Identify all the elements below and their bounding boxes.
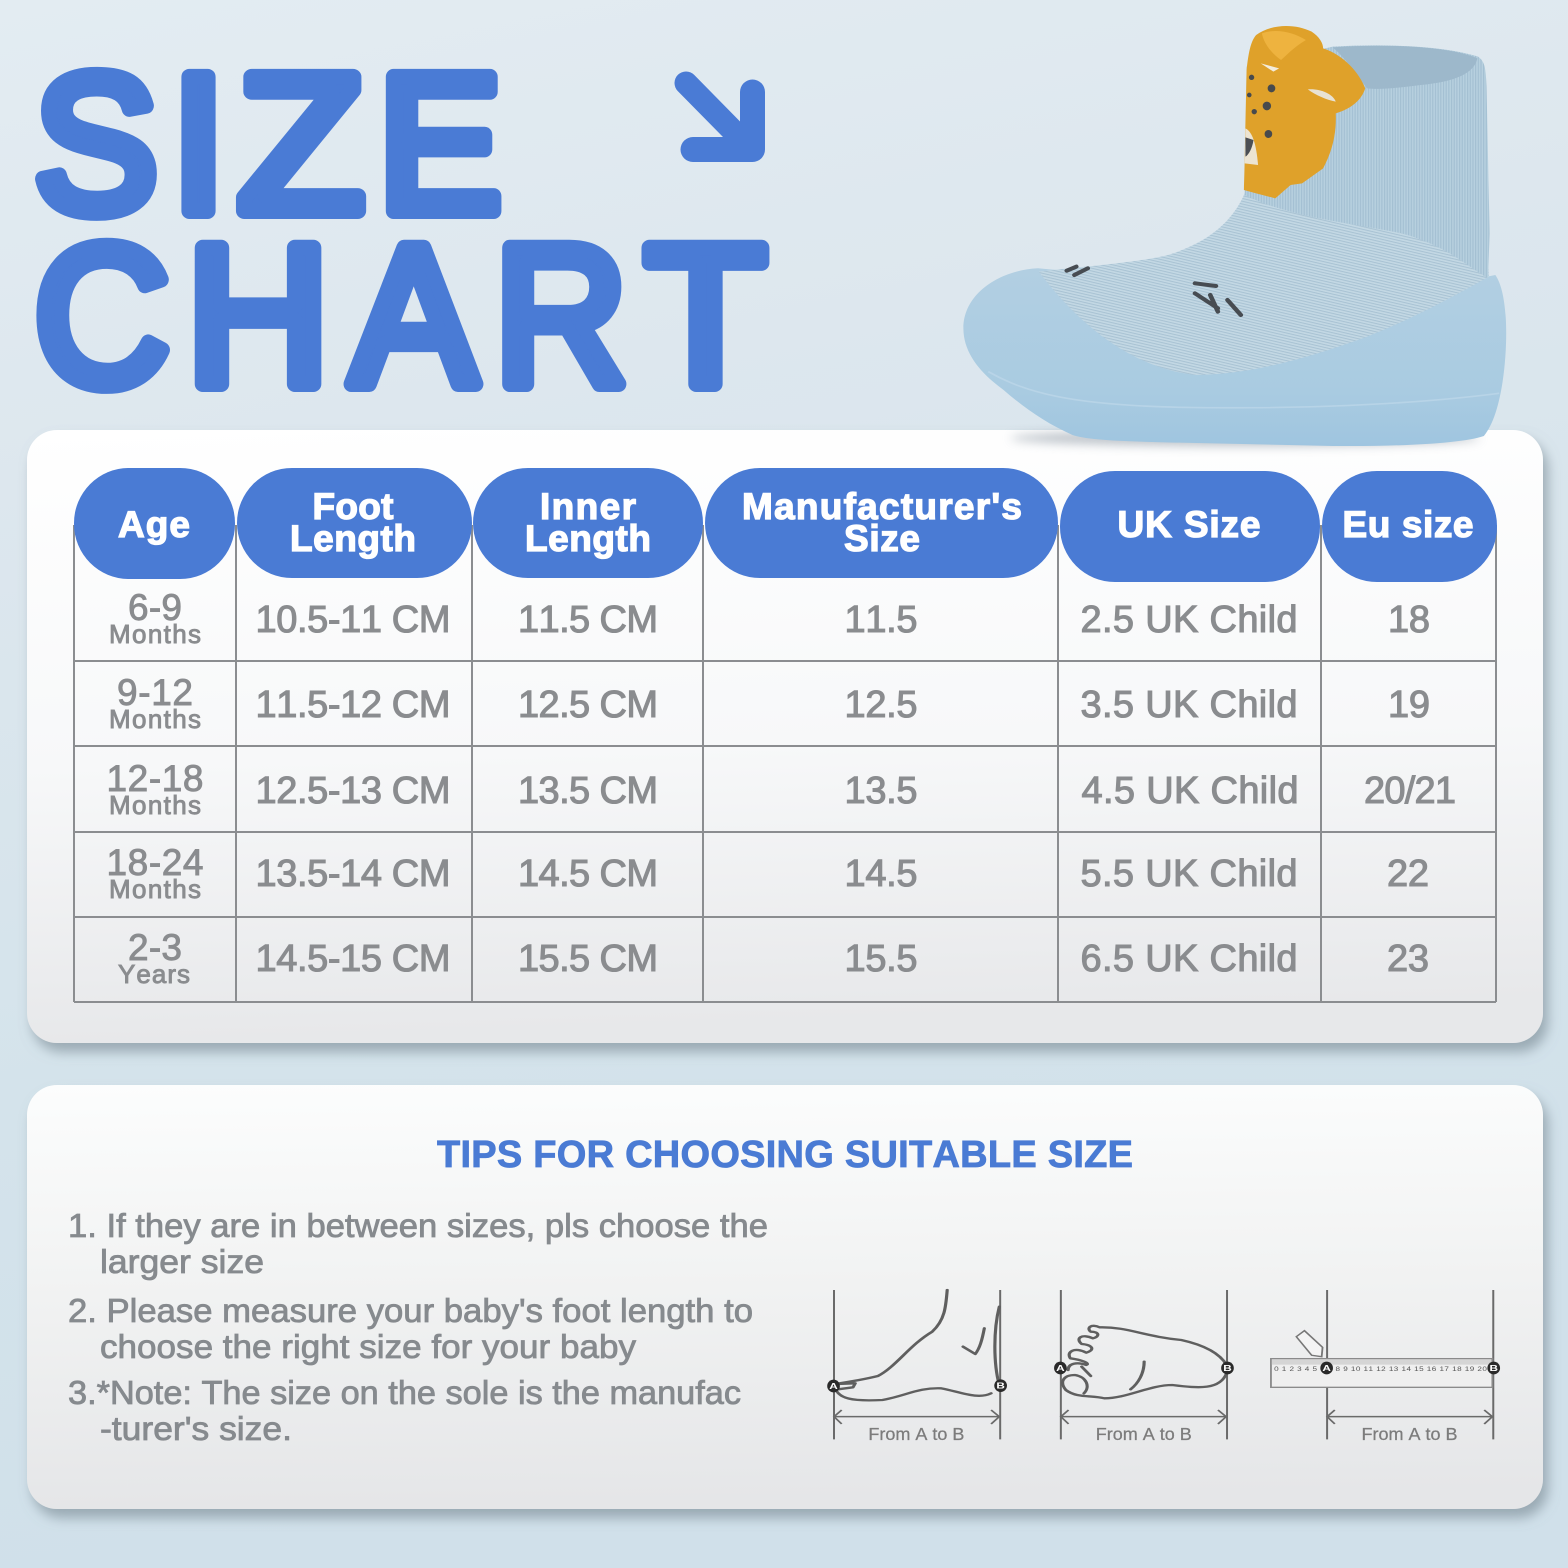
tips list xyxy=(68,1207,768,1447)
title: size chart: T xyxy=(645,205,766,426)
table header labels: Length xyxy=(525,518,651,559)
row: 9-12 months: 3.5 UK Child xyxy=(1080,684,1298,726)
table header labels: Length xyxy=(290,518,416,559)
diagram: ruler: A xyxy=(1322,1364,1332,1374)
sock opening xyxy=(1333,46,1477,89)
diagram: foot sole view: B xyxy=(1223,1364,1232,1374)
row: 9-12 months: 9-12 xyxy=(117,672,193,713)
title: size chart: R xyxy=(495,205,627,426)
table header pills xyxy=(74,468,1497,582)
row: 18-24 months: 14.5 CM xyxy=(518,853,658,895)
toe marks xyxy=(1067,267,1241,315)
row: 9-12 months: 19 xyxy=(1388,684,1430,726)
row: 18-24 months: 13.5-14 CM xyxy=(256,853,450,895)
row: 6-9 months: 2.5 UK Child xyxy=(1080,599,1298,641)
table header labels: Eu size xyxy=(1342,504,1474,545)
table header labels: Manufacturer's xyxy=(742,486,1022,527)
row: 2-3 years: Years xyxy=(118,959,190,989)
title: size chart: I xyxy=(171,35,226,253)
diagram: foot sole view: From A to B xyxy=(1096,1425,1192,1444)
row: 18-24 months: 18-24 xyxy=(106,842,204,883)
row: 2-3 years: 15.5 xyxy=(844,938,918,980)
tips list: larger size xyxy=(100,1243,264,1280)
leopard spots xyxy=(1247,75,1275,138)
row: 6-9 months: 11.5 CM xyxy=(518,599,658,641)
title: size chart: E xyxy=(378,36,502,253)
diagram: ruler: 0 1 2 3 4 5 6 7 8 9 10 11 12 13 14 15 16 17 18 19 20 xyxy=(1274,1366,1487,1373)
diagram: foot side view: From A to B xyxy=(868,1425,964,1444)
row: 9-12 months xyxy=(109,672,1430,734)
table header labels: Size xyxy=(844,518,920,559)
icon: arrow xyxy=(686,83,752,150)
row: 2-3 years: 6.5 UK Child xyxy=(1080,938,1298,980)
panel: size table xyxy=(27,430,1543,1043)
row: 18-24 months xyxy=(106,842,1429,904)
diagram: foot side view xyxy=(827,1290,1007,1444)
row: 12-18 months: 12-18 xyxy=(106,758,204,799)
row: 12-18 months: 13.5 xyxy=(844,770,918,812)
row: 18-24 months: Months xyxy=(109,874,201,904)
tips list: choose the right size for your baby xyxy=(100,1328,637,1365)
row: 9-12 months: 12.5 xyxy=(844,684,918,726)
sock upper xyxy=(1245,45,1490,278)
table header labels: Age xyxy=(118,504,190,545)
diagram: foot sole view xyxy=(1054,1290,1234,1444)
row: 2-3 years: 23 xyxy=(1387,938,1429,980)
title: size chart: S xyxy=(34,36,158,253)
row: 12-18 months xyxy=(106,758,1456,820)
row: 6-9 months: 6-9 xyxy=(128,587,182,628)
title: size chart xyxy=(34,34,766,426)
tips heading: TIPS FOR CHOOSING SUITABLE SIZE xyxy=(437,1134,1133,1176)
diagram: foot side view: B xyxy=(996,1382,1005,1391)
row: 12-18 months: 20/21 xyxy=(1364,770,1456,812)
row: 12-18 months: 12.5-13 CM xyxy=(256,770,450,812)
tips list: -turer's size. xyxy=(100,1410,292,1447)
table header labels: Inner xyxy=(540,486,636,527)
tips list: 2. Please measure your baby's foot length to xyxy=(68,1292,753,1329)
row: 2-3 years: 15.5 CM xyxy=(518,938,658,980)
row: 12-18 months: Months xyxy=(109,790,201,820)
diagram: ruler xyxy=(1271,1290,1500,1444)
row: 9-12 months: 11.5-12 CM xyxy=(256,684,450,726)
diagram: foot sole view: A xyxy=(1056,1364,1065,1374)
product photo: baby sock shoe xyxy=(963,26,1506,446)
row: 2-3 years xyxy=(118,927,1429,989)
leopard ear inner xyxy=(1262,31,1306,60)
title: size chart: C xyxy=(34,205,170,426)
row: 2-3 years: 14.5-15 CM xyxy=(256,938,450,980)
row: 18-24 months: 22 xyxy=(1387,853,1429,895)
row: 6-9 months xyxy=(109,587,1430,649)
shoe shadow xyxy=(1010,430,1480,446)
table header labels: Foot xyxy=(312,486,394,527)
diagram: foot side view: A xyxy=(829,1382,838,1392)
leopard head xyxy=(1244,26,1365,198)
row: 6-9 months: 18 xyxy=(1388,599,1430,641)
diagram: ruler: B xyxy=(1489,1364,1498,1374)
row: 6-9 months: Months xyxy=(109,619,201,649)
diagram: ruler: From A to B xyxy=(1362,1425,1458,1444)
sole ridge xyxy=(988,372,1499,408)
table header labels: UK Size xyxy=(1118,504,1260,545)
row: 9-12 months: 12.5 CM xyxy=(518,684,658,726)
tips list: 1. If they are in between sizes, pls choose the xyxy=(68,1207,768,1244)
row: 6-9 months: 11.5 xyxy=(844,599,918,641)
table header labels xyxy=(118,486,1474,559)
title: size chart: A xyxy=(351,205,476,426)
title: size chart: Z xyxy=(238,34,364,253)
row: 12-18 months: 13.5 CM xyxy=(518,770,658,812)
tips list: 3.*Note: The size on the sole is the manufac xyxy=(68,1374,741,1411)
panel: tips xyxy=(27,1085,1543,1509)
leopard ear highlight and muzzle xyxy=(1245,63,1336,165)
row: 12-18 months: 4.5 UK Child xyxy=(1082,770,1298,812)
row: 9-12 months: Months xyxy=(109,704,201,734)
table grid xyxy=(74,525,1496,1002)
row: 18-24 months: 14.5 xyxy=(844,853,918,895)
sock lower xyxy=(1039,193,1489,375)
row: 18-24 months: 5.5 UK Child xyxy=(1080,853,1298,895)
row: 2-3 years: 2-3 xyxy=(128,927,182,968)
row: 6-9 months: 10.5-11 CM xyxy=(256,599,450,641)
title: size chart: H xyxy=(186,205,330,426)
shoe sole xyxy=(963,268,1506,446)
